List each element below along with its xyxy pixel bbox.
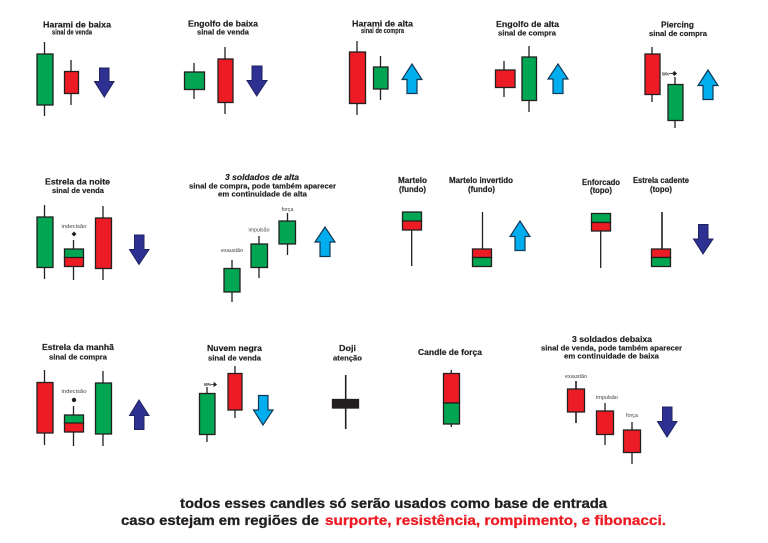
label: 50%: 50% [662,72,669,76]
signal: sinal de compra: sinal de compra [361,28,404,35]
signal: sinal de compra: sinal de compra [49,354,107,362]
candle: green [374,56,388,100]
heading: 3 soldados de alta: 3 soldados de alta [225,172,299,182]
candle: red [96,206,112,280]
panel: Nuvem negra [200,343,273,442]
heading: Martelo invertido: Martelo invertido [449,175,513,185]
heading: Estrela da noite: Estrela da noite [45,176,110,186]
panel: Estrela cadente [633,175,713,266]
candle: shooting star [652,212,670,266]
signal: topo: (topo) [590,185,612,195]
panel: Estrela da noite [37,176,149,280]
heading: Candle de força: Candle de força [418,347,482,357]
panel: 3 soldados debaixa [541,334,682,464]
heading: 3 soldados debaixa: 3 soldados debaixa [572,334,652,344]
panel: Piercing [645,20,718,128]
signal: sinal de compra: sinal de compra [498,30,556,38]
candle: impulsão [596,403,614,445]
candle: força [279,213,296,255]
arrow: up navy [130,400,149,430]
candle: green [37,42,53,116]
heading: Piercing: Piercing [661,20,694,30]
arrow: down light blue [254,396,273,425]
candle: indecision [64,406,84,446]
arrow: up light blue [315,227,335,256]
candle: green [37,205,53,279]
arrow: down navy [94,68,114,97]
signal: atenção: atenção [333,356,362,362]
label: indecisão: indecisão [62,389,87,395]
label: força: força [626,413,638,419]
label: impulsão: impulsão [248,228,270,234]
candle: indecision [64,240,84,280]
label: impulsão: impulsão [596,395,618,401]
candle: exaustão [224,260,240,302]
panel: Martelo [398,175,427,266]
panel: Engolfo de alta [496,19,568,112]
marker: dot [72,398,76,402]
heading: Nuvem negra: Nuvem negra [207,343,262,353]
label: força: força [282,207,294,213]
footer note [121,495,666,528]
candle: red [350,41,366,115]
panel: Candle de força [418,347,482,427]
candle: hammer [402,212,422,266]
candle: red [645,47,660,102]
signal text: sinal de compra, pode também aparecer [189,184,336,190]
signal: fundo: (fundo) [468,184,495,194]
candle: green [668,77,683,128]
footer line 1: todos esses candles só serão usados como base de entrada [180,495,607,511]
heading: Harami de alta: Harami de alta [352,18,413,28]
candle: green [96,371,112,446]
candle: red [496,61,515,97]
candle: green [200,387,215,442]
arrow: up light blue [510,221,530,250]
arrow: down navy [247,66,267,96]
arrow: down navy [694,224,713,254]
arrow: down navy [658,407,677,437]
panel: 3 soldados de alta [189,172,336,302]
candle: doji [332,375,358,429]
heading: Engolfo de alta: Engolfo de alta [496,19,559,29]
signal text: sinal de venda, pode também aparecer [541,346,682,352]
signal text line 2: em continuidade de baixa [564,354,659,360]
heading: Martelo: Martelo [398,175,427,185]
heading: Estrela cadente: Estrela cadente [633,175,689,185]
signal: topo: (topo) [650,184,672,194]
marker: 50% arrow [211,382,216,386]
signal: sinal de venda: sinal de venda [52,188,104,195]
candle: red [64,60,78,105]
panel: Doji [332,343,362,429]
candle: green [522,46,536,112]
heading: Doji: Doji [339,343,356,353]
label: exaustão: exaustão [565,374,587,380]
arrow: up light blue [548,64,568,94]
footer highlight: surporte, resistência, rompimento, e fibonacci. [325,512,666,528]
candle: hanging man [592,214,610,268]
heading: Engolfo de baixa: Engolfo de baixa [188,18,258,28]
candle: red [37,370,53,445]
panel: Martelo invertido [449,175,530,266]
heading: Enforcado: Enforcado [582,177,620,187]
signal: sinal de compra: sinal de compra [649,31,707,38]
heading: Estrela da manhã: Estrela da manhã [42,342,114,352]
signal: fundo: (fundo) [399,184,426,194]
arrow: up light blue [698,70,718,100]
candle: inverted hammer [472,212,492,266]
arrow: down navy [130,235,149,264]
label: exaustão: exaustão [221,248,243,254]
candle: força [624,422,640,464]
signal: sinal de venda: sinal de venda [52,30,92,36]
candle: red [218,47,233,114]
candle: strength [444,370,460,427]
heading: Harami de baixa: Harami de baixa [43,20,111,30]
label: indecisão: indecisão [62,224,87,230]
footer line 2: caso estejam em regiões de [121,512,319,528]
arrow: up light blue [402,64,422,94]
label: 50%: 50% [204,382,211,387]
panel: Engolfo de baixa [184,18,267,114]
panel: Harami de alta [350,18,422,115]
marker: dot [72,232,76,236]
panel: Enforcado [582,177,620,268]
candle: exaustão [568,381,584,423]
marker: 50% dot [669,72,676,76]
candle: red [228,366,242,418]
signal: sinal de venda: sinal de venda [197,30,249,36]
panel: Harami de baixa [37,20,114,116]
candle: green [184,63,204,99]
signal: sinal de venda: sinal de venda [208,356,261,362]
candle: impulsão [251,236,268,278]
panel: Estrela da manhã [37,342,149,446]
signal text line 2: em continuidade de alta [218,192,307,198]
